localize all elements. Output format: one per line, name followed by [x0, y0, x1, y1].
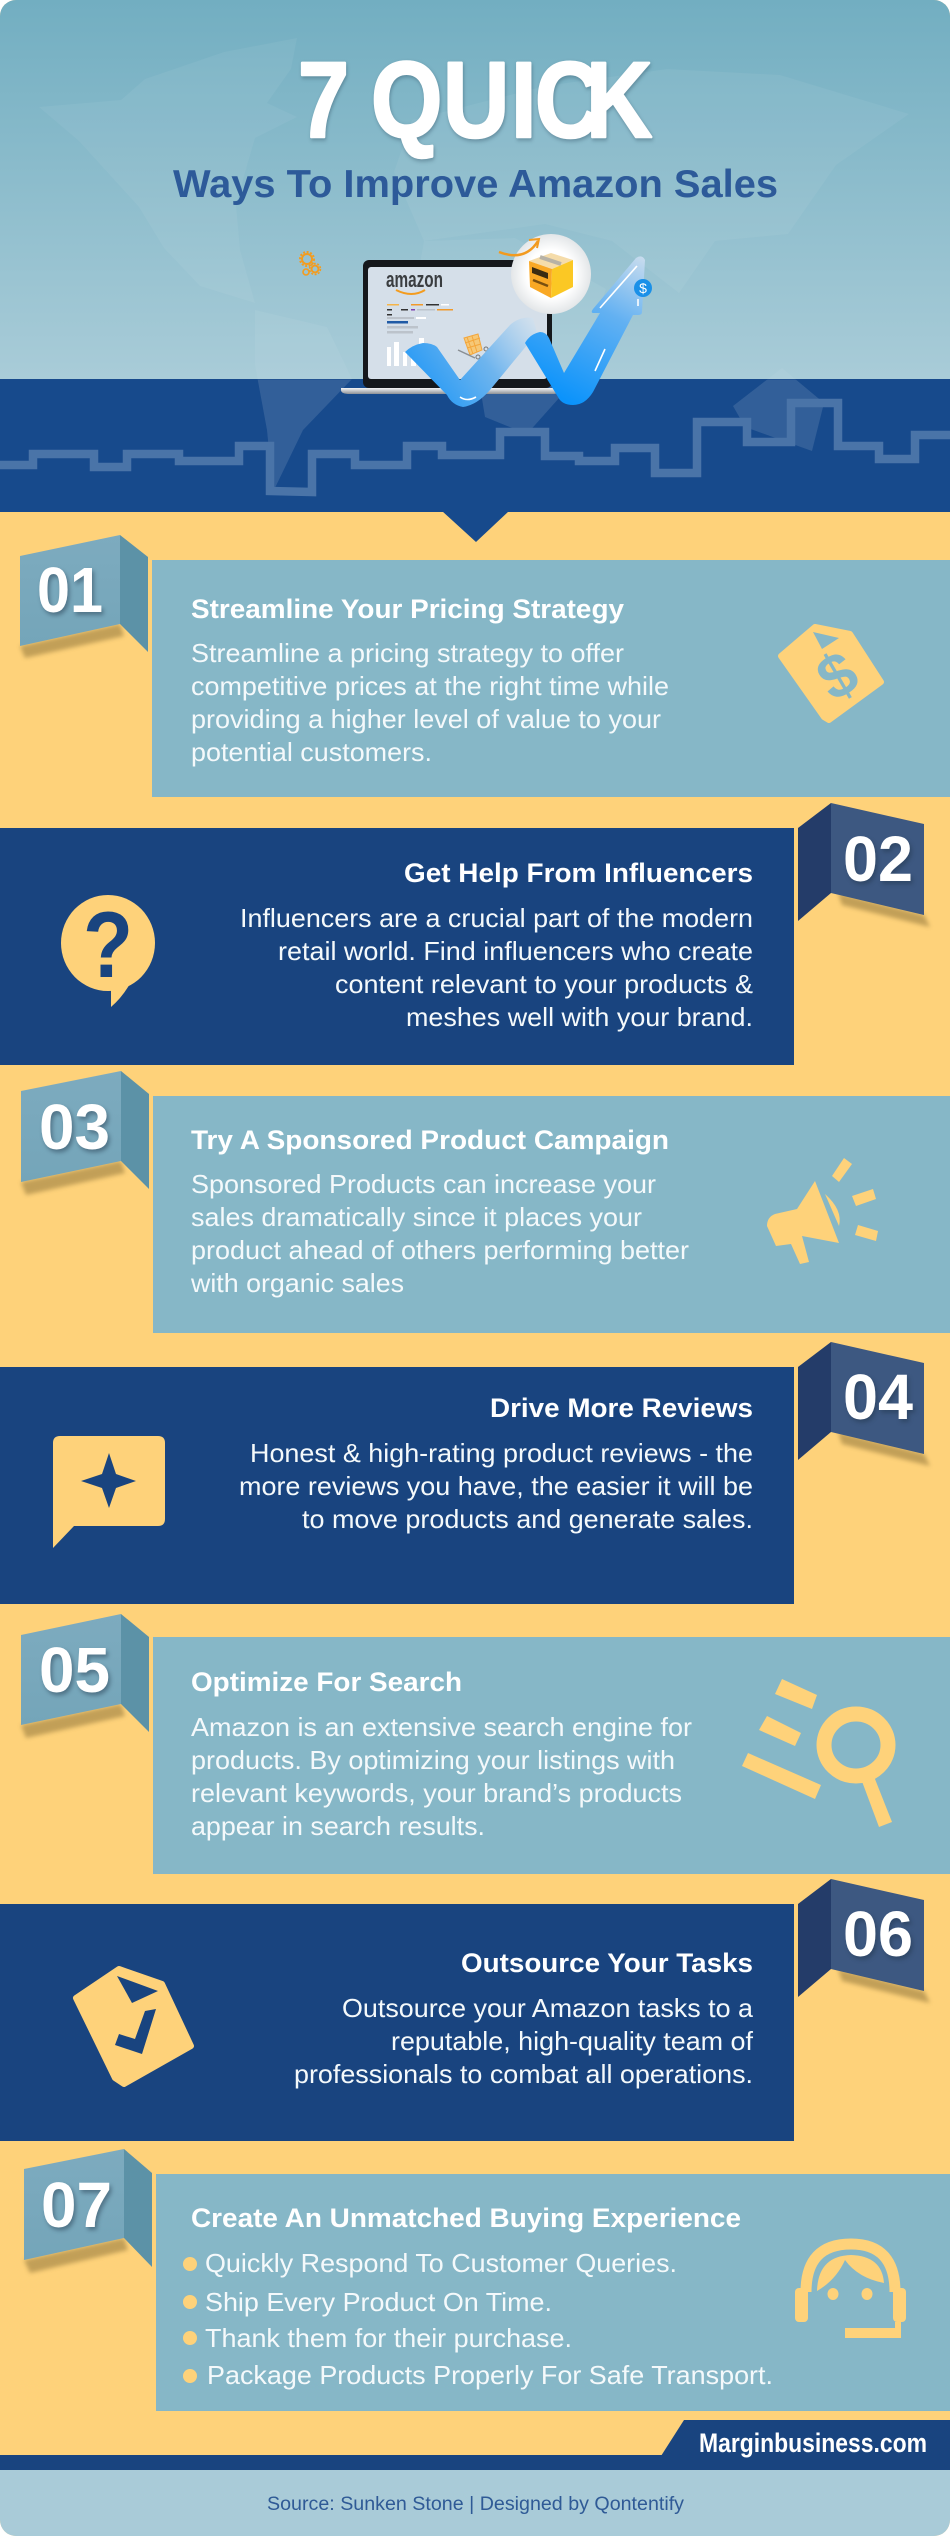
icon: dollar coin: $ [639, 280, 647, 296]
ribbon 03: 03 [39, 1091, 110, 1163]
text 03: sales dramatically since it places your [191, 1202, 642, 1232]
text 01: competitive prices at the right time while [191, 671, 669, 701]
text 05: Amazon is an extensive search engine for [191, 1712, 692, 1742]
text 04: Honest & high-rating product reviews - the [250, 1438, 753, 1468]
text 02: content relevant to your products & [335, 969, 753, 999]
heading 02: Get Help From Influencers [404, 858, 753, 888]
ribbon 04 [798, 1342, 930, 1466]
bullet list [183, 2248, 773, 2390]
ribbon 07: 07 [41, 2169, 112, 2241]
subtitle: Ways To Improve Amazon Sales [173, 163, 778, 206]
text 05: products. By optimizing your listings with [191, 1745, 675, 1775]
text 02: meshes well with your brand. [406, 1002, 753, 1032]
header sky [0, 0, 950, 380]
hero: rising arrow [405, 256, 652, 407]
text 01: Streamline a pricing strategy to offer [191, 638, 624, 668]
icon: cart [458, 334, 488, 359]
text 06: Outsource your Amazon tasks to a [342, 1993, 754, 2023]
footer bar [0, 2455, 950, 2470]
ribbon 04: 04 [843, 1361, 913, 1433]
title: 7 QUICK [298, 40, 652, 161]
text 05 [191, 1712, 692, 1841]
ribbon 05: 05 [39, 1634, 110, 1706]
text 01: potential customers. [191, 737, 432, 767]
ribbon 01 [20, 535, 148, 658]
text 06: professionals to combat all operations. [294, 2059, 753, 2089]
ribbon 02 [798, 803, 930, 927]
text 01 [191, 638, 669, 767]
hero: package disc [499, 234, 591, 314]
ribbon 03 [21, 1071, 149, 1195]
panel: step 04 [0, 1342, 930, 1604]
header navy band [0, 379, 950, 512]
icon: review bubble [53, 1436, 165, 1548]
header panel [0, 0, 950, 542]
heading 06: Outsource Your Tasks [461, 1948, 753, 1978]
footer: Source: Sunken Stone | Designed by Qontentify [267, 2494, 685, 2515]
icon: gears [300, 252, 320, 275]
heading 05: Optimize For Search [191, 1667, 462, 1697]
icon: question bubble [61, 892, 155, 1007]
text 02: retail world. Find influencers who create [278, 936, 753, 966]
text 06 [294, 1993, 754, 2089]
icon: checklist [76, 1969, 191, 2084]
stepped line [0, 403, 950, 492]
footer [0, 2470, 950, 2536]
text 04 [239, 1438, 753, 1534]
panel: step 07 [24, 2149, 950, 2411]
bullet list: Quickly Respond To Customer Queries. [205, 2248, 677, 2278]
panel: step 03 [21, 1071, 950, 1333]
text 03: with organic sales [190, 1268, 404, 1298]
heading 04: Drive More Reviews [490, 1393, 753, 1423]
heading 07: Create An Unmatched Buying Experience [191, 2203, 741, 2233]
ribbon 06 [798, 1879, 930, 2003]
icon: headset agent [795, 2244, 906, 2338]
ribbon 07 [24, 2149, 152, 2273]
icon: price tag [781, 627, 881, 720]
heading 03: Try A Sponsored Product Campaign [191, 1125, 669, 1155]
panel: step 02 [0, 803, 930, 1065]
panel: step 06 [0, 1879, 930, 2141]
text 02 [240, 903, 753, 1032]
text 06: reputable, high-quality team of [391, 2026, 754, 2056]
text 03 [190, 1169, 689, 1298]
panel: step 01 [20, 535, 950, 797]
bullet list: Package Products Properly For Safe Transport. [207, 2360, 773, 2390]
icon: dollar coin [634, 279, 652, 297]
website tag [661, 2420, 950, 2458]
header pointer [442, 511, 509, 542]
icon: price tag: $ [806, 638, 870, 715]
text 04: more reviews you have, the easier it will be [239, 1471, 753, 1501]
text 04: to move products and generate sales. [302, 1504, 753, 1534]
ribbon 01: 01 [37, 554, 103, 626]
icon: question bubble: ? [83, 892, 133, 997]
bullet list: Thank them for their purchase. [205, 2323, 572, 2353]
hero: laptop [341, 260, 560, 394]
ribbon 06: 06 [843, 1898, 913, 1970]
text 05: relevant keywords, your brand’s products [191, 1778, 682, 1808]
ribbon 05 [21, 1614, 149, 1738]
text 03: Sponsored Products can increase your [191, 1169, 656, 1199]
bullet list: Ship Every Product On Time. [205, 2287, 552, 2317]
text 01: providing a higher level of value to your [191, 704, 661, 734]
text 02: Influencers are a crucial part of the modern [240, 903, 753, 933]
panel: step 05 [21, 1614, 950, 1874]
icon: megaphone [767, 1158, 878, 1264]
icon: magnifier [742, 1679, 892, 1827]
ribbon 02: 02 [843, 823, 913, 895]
hero: laptop: amazon [386, 267, 443, 292]
world map [258, 379, 823, 487]
text 03: product ahead of others performing better [191, 1235, 689, 1265]
heading 01: Streamline Your Pricing Strategy [191, 594, 624, 624]
text 05: appear in search results. [191, 1811, 485, 1841]
